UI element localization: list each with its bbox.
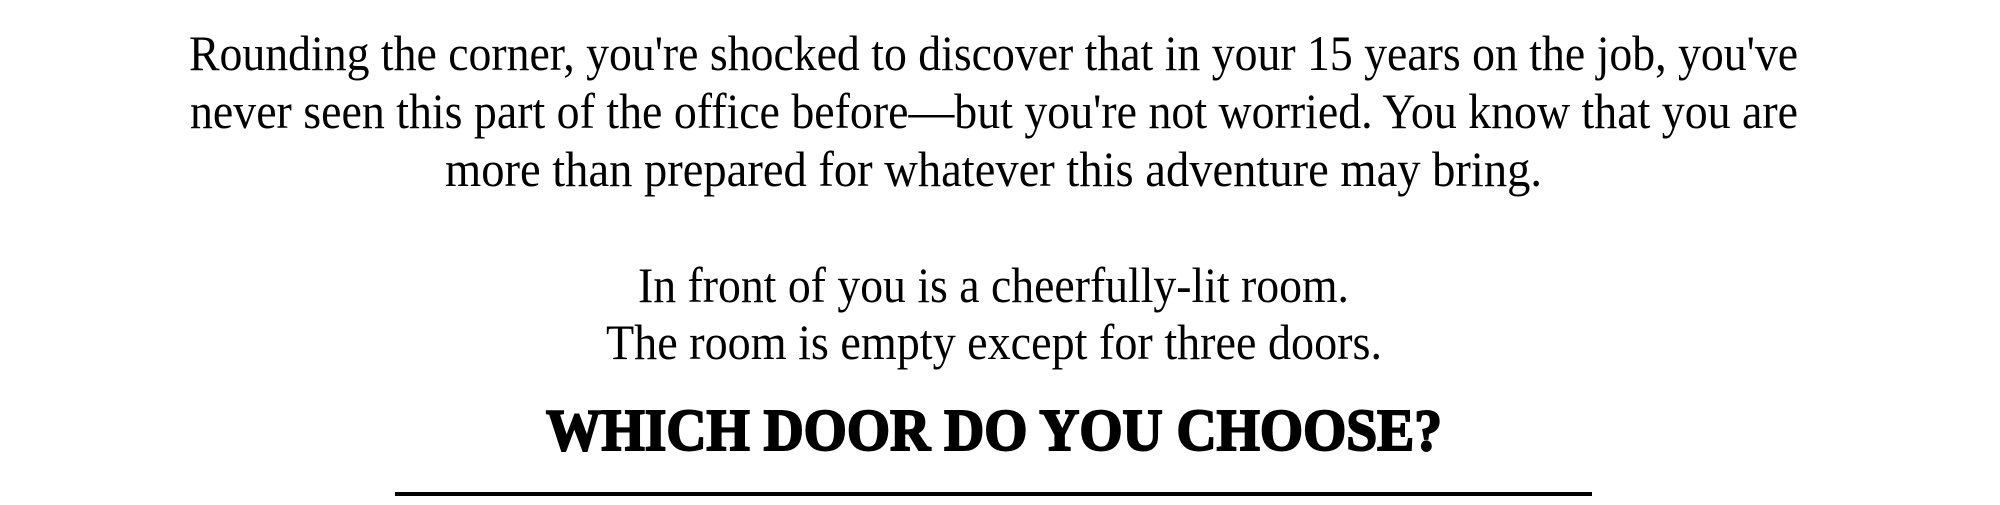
intro paragraph: never seen this part of the office before—but you're not worried. You know that you are (190, 83, 1798, 139)
rule under heading (395, 492, 1592, 496)
heading: WHICH DOOR DO YOU CHOOSE? (546, 397, 1442, 463)
intro paragraph: more than prepared for whatever this adventure may bring. (445, 141, 1542, 197)
intro paragraph: Rounding the corner, you're shocked to discover that in your 15 years on the job, you've (189, 25, 1798, 81)
room description: The room is empty except for three doors. (606, 314, 1382, 370)
room description: In front of you is a cheerfully-lit room. (638, 257, 1349, 313)
intro paragraph (189, 25, 1798, 197)
room description (606, 257, 1382, 370)
